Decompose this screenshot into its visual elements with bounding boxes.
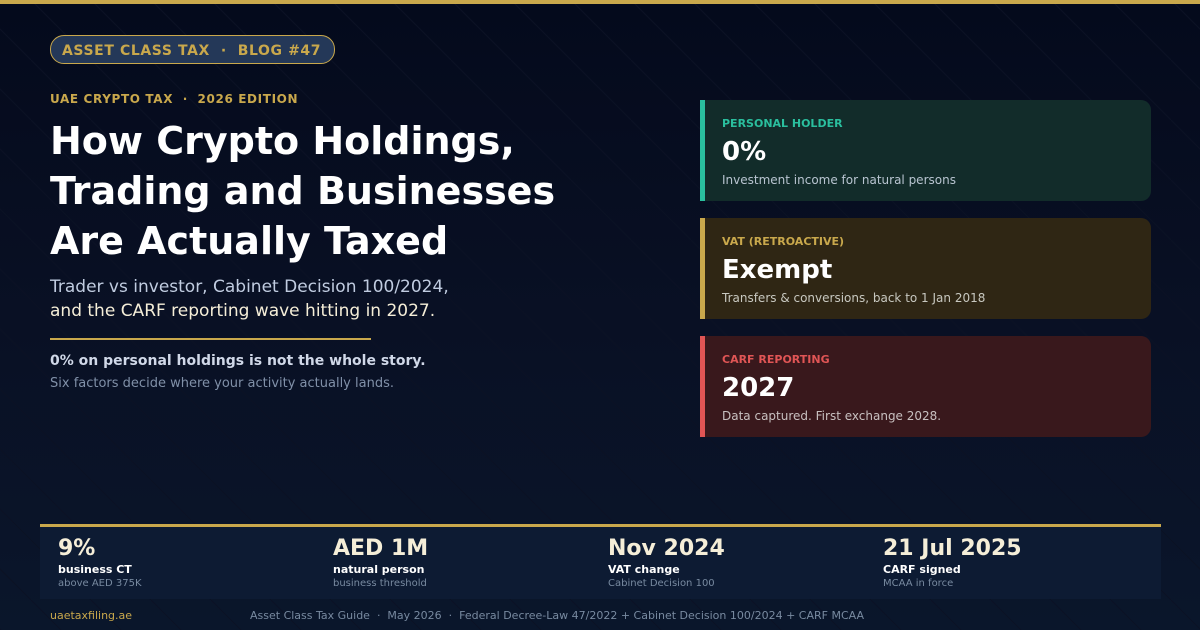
stat: natural person: natural person [333,563,424,576]
stat: business CT: 9% [58,536,95,561]
subtitle: Trader vs investor, Cabinet Decision 100/2024, and the CARF reporting wave hitting in 2027. [50,277,449,321]
panel: VAT [700,218,1151,319]
panel: CARF: CARF REPORTING [722,353,830,366]
stat: CARF signed: CARF signed [883,563,961,576]
stat: VAT change: Cabinet Decision 100 [608,578,715,589]
stat: natural person: business threshold [333,578,427,589]
panel: personal holder: 0% [722,137,766,167]
divider [50,338,371,340]
stat: natural person [333,536,428,589]
panel: CARF: Data captured. First exchange 2028. [722,409,941,423]
stat: CARF signed: 21 Jul 2025 [883,536,1022,561]
stat: VAT change: VAT change [608,563,680,576]
panel: VAT: Transfers & conversions, back to 1 Jan 2018 [722,291,985,305]
panel: personal holder: PERSONAL HOLDER [722,117,843,130]
stat: CARF signed [883,536,1022,589]
key message: 0% on personal holdings is not the whole story. [50,353,426,369]
panel: CARF [700,336,1151,437]
badge [50,35,335,64]
stats strip [40,524,1161,599]
footer site: uaetaxfiling.ae [50,609,132,622]
panel: personal holder [700,100,1151,201]
panel: VAT: VAT (RETROACTIVE) [722,235,844,248]
stat: business CT [58,536,142,589]
panel: CARF: 2027 [722,373,794,403]
stat: VAT change [608,536,725,589]
stat: natural person: AED 1M [333,536,428,561]
eyebrow: UAE CRYPTO TAX · 2026 EDITION [50,92,298,106]
stat: business CT: above AED 375K [58,578,142,589]
title: How Crypto Holdings, Trading and Businesses Are Actually Taxed [50,119,555,263]
stat: VAT change: Nov 2024 [608,536,725,561]
stat: CARF signed: MCAA in force [883,578,953,589]
panel: VAT: Exempt [722,255,832,285]
supporting note: Six factors decide where your activity actually lands. [50,376,394,391]
footer source: Asset Class Tax Guide · May 2026 · Federal Decree-Law 47/2022 + Cabinet Decision 100/2024 + CARF MCAA [250,609,864,622]
panel: personal holder: Investment income for natural persons [722,173,956,187]
stat: business CT: business CT [58,563,132,576]
badge: ASSET CLASS TAX · BLOG #47 [62,43,321,59]
